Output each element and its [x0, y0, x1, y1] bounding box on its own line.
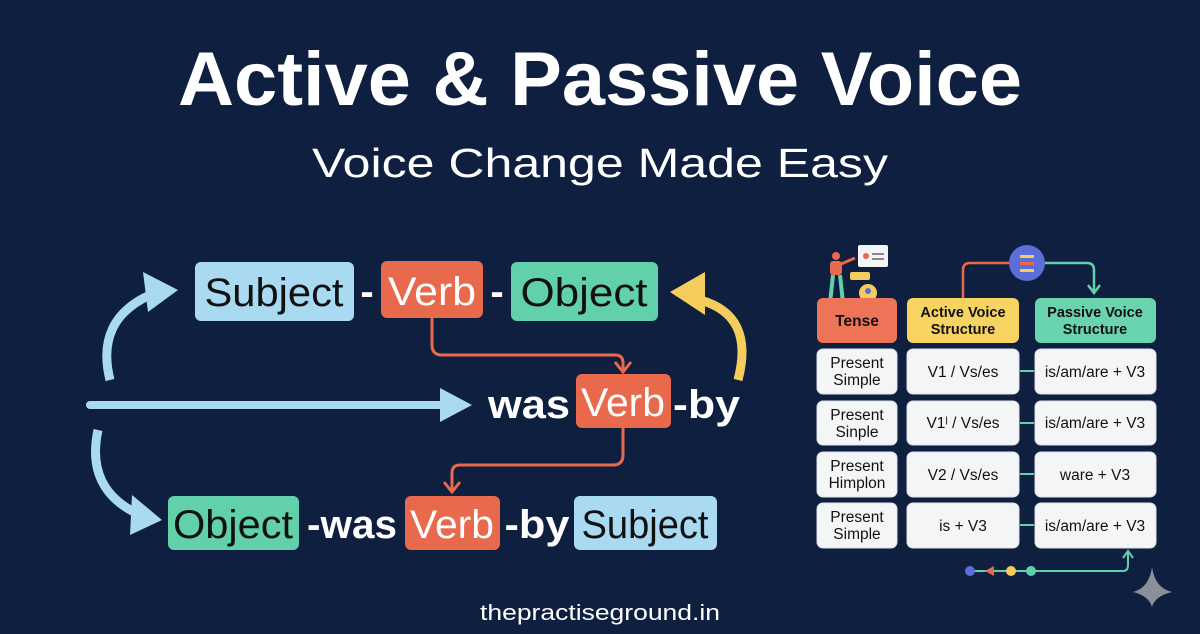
subtitle: Voice Change Made Easy	[312, 140, 889, 186]
table rows: Present	[830, 407, 884, 424]
icon: list circle with connectors	[963, 245, 1100, 298]
footer: thepractiseground.in	[480, 600, 720, 625]
header: active voice structure: Structure	[931, 322, 995, 338]
header: passive voice structure	[1035, 298, 1156, 343]
table rows: Simple	[833, 372, 881, 389]
row: active sentence	[195, 261, 658, 321]
row: active sentence: Object	[520, 271, 648, 315]
row: active sentence: -	[360, 270, 374, 314]
arrow: curved up to subject	[107, 295, 150, 380]
arrow: main horizontal	[90, 401, 440, 409]
row: active sentence: -	[490, 270, 504, 314]
table rows: ware + V3	[1059, 467, 1130, 484]
row: middle was verb by: -by	[673, 383, 741, 427]
table rows: V2 / Vs/es	[928, 467, 999, 484]
table rows: is + V3	[939, 518, 987, 535]
arrow: verb to middle	[432, 318, 623, 372]
icon: dots chain arrow	[965, 551, 1133, 576]
table rows: V1 / Vs/es	[928, 364, 999, 381]
table rows: Sinple	[835, 424, 879, 441]
row: middle was verb by: Verb	[581, 381, 665, 425]
row: passive sentence: -was	[307, 503, 397, 547]
table rows: V1ˡ / Vs/es	[926, 415, 1000, 432]
row: active sentence: Verb	[388, 270, 476, 314]
header: passive voice structure: Structure	[1063, 322, 1127, 338]
table rows	[817, 349, 1156, 548]
table rows: is/am/are + V3	[1045, 518, 1145, 535]
arrow: curved down to object	[96, 430, 140, 515]
row: passive sentence: -by	[504, 503, 570, 547]
panel: tense table	[817, 245, 1156, 576]
table rows: Simple	[833, 526, 881, 543]
table rows: Present	[830, 355, 884, 372]
row: passive sentence: Subject	[582, 503, 708, 547]
title: Active & Passive Voice	[178, 37, 1022, 122]
arrow: middle to bottom verb	[452, 428, 623, 492]
header: tense	[817, 298, 897, 343]
table rows: Himplon	[829, 475, 885, 492]
row: middle was verb by: was	[487, 383, 570, 427]
header: active voice structure	[907, 298, 1019, 343]
row: middle was verb by	[487, 374, 741, 428]
row: active sentence: Subject	[204, 271, 344, 315]
row: passive sentence: Verb	[410, 503, 494, 547]
header: tense: Tense	[835, 313, 879, 330]
table rows: is/am/are + V3	[1045, 364, 1145, 381]
arrow: yellow curved up to object	[700, 300, 742, 380]
table rows: Present	[830, 509, 884, 526]
diagram: voice change flow	[90, 261, 742, 550]
row: passive sentence: Object	[173, 503, 293, 547]
icon: person presenting	[830, 245, 888, 303]
table rows: is/am/are + V3	[1045, 415, 1145, 432]
icon: sparkle	[1133, 567, 1172, 607]
table rows: Present	[830, 458, 884, 475]
header: active voice structure: Active Voice	[920, 305, 1006, 321]
row: passive sentence	[168, 496, 717, 550]
header: passive voice structure: Passive Voice	[1047, 305, 1143, 321]
